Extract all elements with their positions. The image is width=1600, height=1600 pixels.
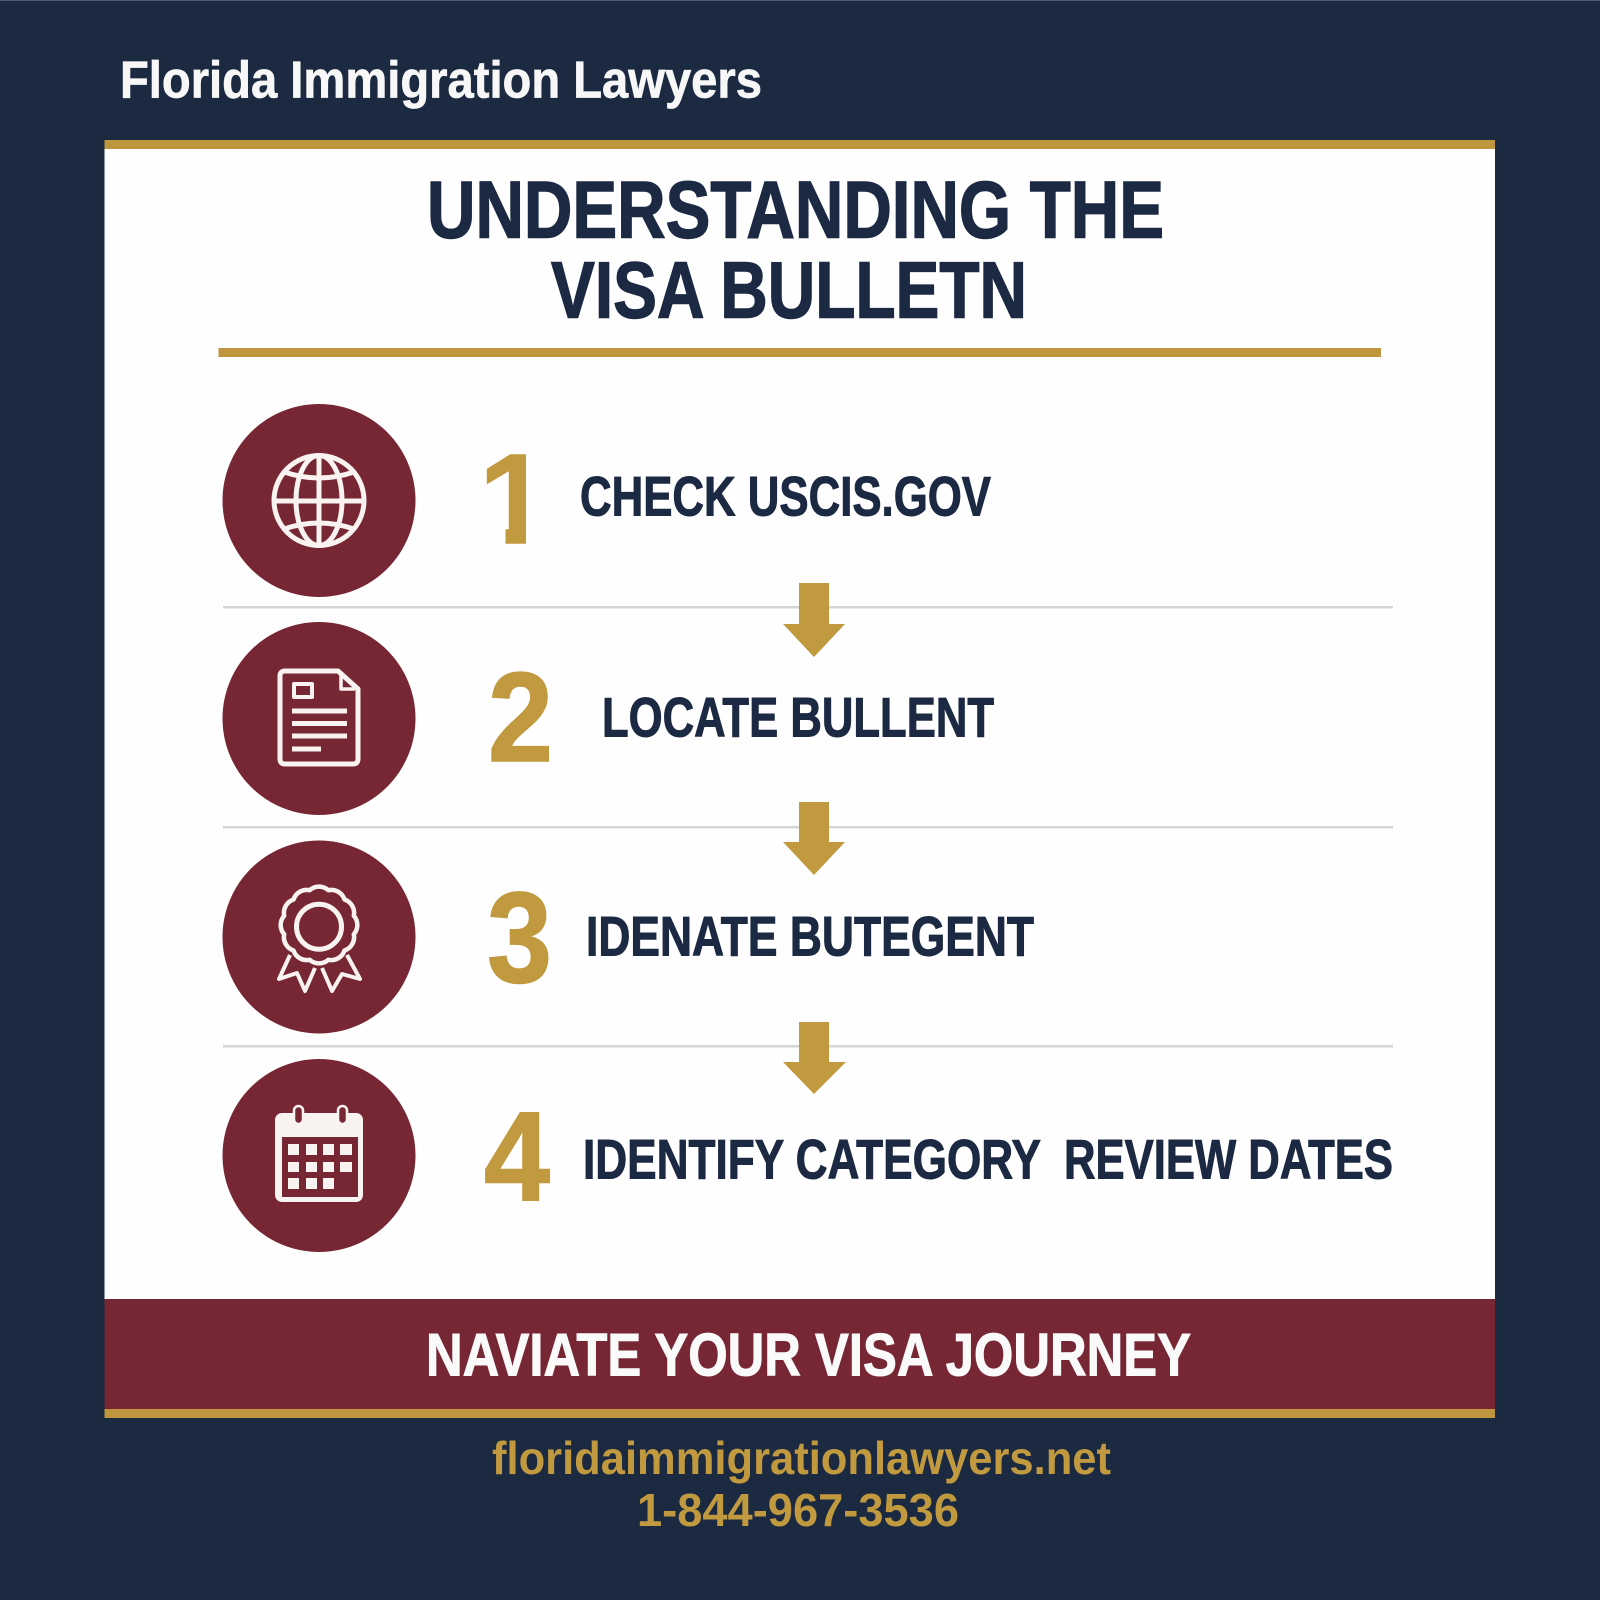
footer contact details: floridaimmigrationlawyers.net — [492, 1432, 1111, 1484]
title: UNDERSTANDING THE — [427, 166, 1164, 256]
arrow 1 — [783, 583, 845, 657]
step number 3: 3 — [487, 866, 552, 1010]
step 1: check uscis.gov — [222, 404, 991, 597]
title underline — [218, 348, 1381, 357]
step number 4: 4 — [484, 1086, 550, 1228]
step 2: locate bulletin — [222, 622, 994, 815]
arrow 2 — [783, 802, 845, 875]
step label 4: IDENTIFY CATEGORY — [583, 1128, 1041, 1190]
title: VISA BULLETN — [551, 246, 1027, 334]
banner: call to action — [104, 1299, 1495, 1418]
step 3: idenate butegent — [222, 840, 1034, 1034]
step label 3: IDENATE BUTEGENT — [586, 904, 1034, 968]
arrow 3 — [783, 1022, 846, 1094]
brand header: Florida Immigration Lawyers — [120, 52, 762, 110]
title — [427, 166, 1164, 334]
panel: main white card — [104, 140, 1495, 1299]
icon: globe — [222, 404, 416, 597]
footer contact details: 1-844-967-3536 — [637, 1484, 959, 1536]
step number 2: 2 — [488, 646, 553, 788]
footer contact details — [492, 1432, 1111, 1536]
icon: document — [222, 622, 416, 815]
step 4: identify category review dates — [222, 1059, 1393, 1252]
step label 4: REVIEW DATES — [1064, 1128, 1393, 1190]
step label 2: LOCATE BULLENT — [602, 686, 994, 748]
icon: calendar — [222, 1059, 416, 1252]
step number 1: 1 — [478, 428, 552, 571]
step label 1: CHECK USCIS.GOV — [580, 464, 991, 528]
banner: call to action: NAVIATE YOUR VISA JOURNEY — [426, 1322, 1191, 1388]
icon: award ribbon — [222, 840, 416, 1034]
